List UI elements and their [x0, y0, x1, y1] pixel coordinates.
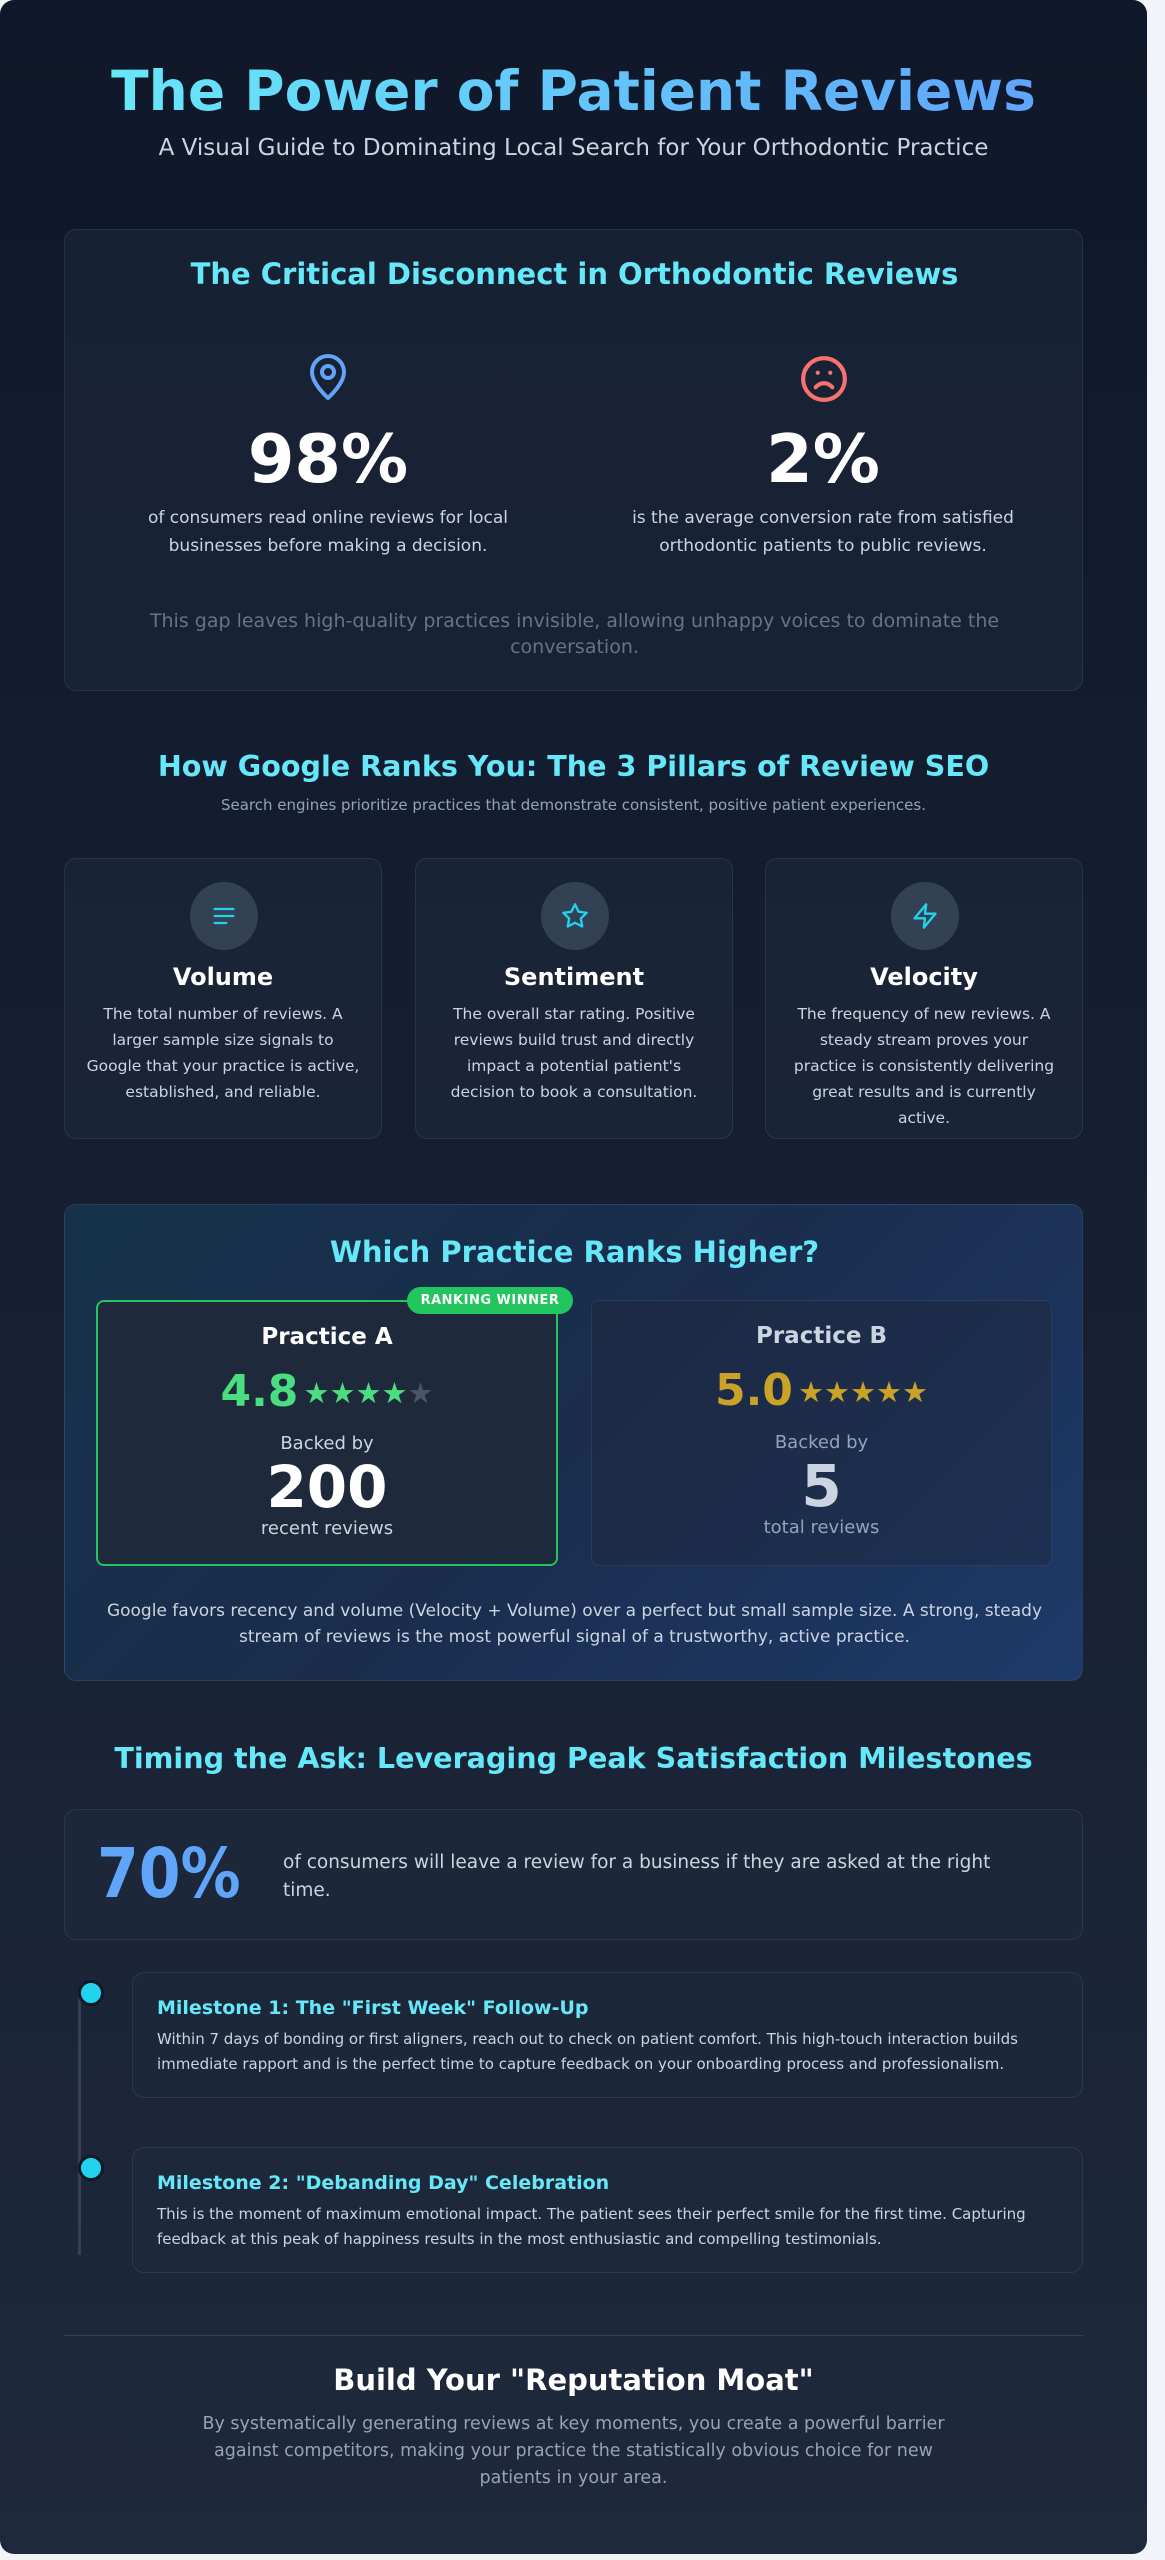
milestone 1: Milestone 1: The "First Week" Follow-Up [157, 1997, 588, 2019]
milestone 2: This is the moment of maximum emotional impact. The patient sees their perfect smile for the first time. Capturing feedback at this peak of happiness results in the most enthusiastic and compelling testimonials. [157, 2205, 1026, 2248]
heading: disconnect: The Critical Disconnect in Orthodontic Reviews [191, 257, 958, 291]
panel: velocity: The frequency of new reviews. A steady stream proves your practice is consistently delivering great results and is currently active. [794, 1005, 1054, 1127]
heading: reputation moat: Build Your "Reputation Moat" [333, 2363, 814, 2397]
panel: sentiment: Sentiment [504, 963, 644, 991]
card: practice A: recent reviews [261, 1518, 393, 1539]
timeline line [78, 1993, 81, 2255]
card: practice A: Practice A [261, 1324, 393, 1350]
note: Google favors recency and volume (Velocity + Volume) over a perfect but small sample size. A strong, steady stream of reviews is the most powerful signal of a trustworthy, active practice. [107, 1601, 1042, 1647]
stat: 98%: 98% [248, 420, 408, 498]
stat: 98%: businesses before making a decision. [169, 536, 487, 556]
badge: ranking winner: RANKING WINNER [421, 1293, 559, 1308]
icon: sad face [801, 356, 847, 402]
rating 4.8: 4.8 ★★★★★ [220, 1366, 434, 1417]
pillars subtitle: Search engines prioritize practices that demonstrate consistent, positive patient experiences. [221, 796, 926, 814]
panel: volume: established, and reliable. [125, 1083, 321, 1101]
title: The Power of Patient Reviews [111, 59, 1036, 123]
panel: 70% stat: of consumers will leave a review for a business if they are asked at the right [283, 1852, 990, 1873]
closing text: By systematically generating reviews at key moments, you create a powerful barrier against competitors, making your practice the statistically obvious choice for new patients in your area. [202, 2414, 945, 2488]
milestone 1 [132, 1972, 1083, 2098]
stat: 2%: orthodontic patients to public reviews. [659, 536, 987, 556]
panel: volume [64, 858, 382, 1139]
stat: 2%: 2% [766, 420, 880, 498]
icon: dot 1 [78, 1980, 104, 2006]
milestone 2: Milestone 2: "Debanding Day" Celebration [157, 2172, 609, 2194]
heading: pillars: How Google Ranks You: The 3 Pillars of Review SEO [158, 749, 989, 783]
icon: star [541, 882, 609, 950]
card: practice B: Backed by [775, 1432, 868, 1453]
card: practice B: total reviews [764, 1517, 879, 1538]
card: practice A [96, 1300, 558, 1566]
stat: 2% [632, 420, 1014, 556]
card: practice B [591, 1300, 1052, 1566]
card: practice A: Backed by [280, 1433, 374, 1454]
panel: volume: Volume [173, 963, 273, 991]
panel: sentiment: The overall star rating. Positive reviews build trust and directly impact a potential patient's decision to book a consultation. [451, 1005, 697, 1101]
panel: volume: The total number of reviews. A [103, 1005, 343, 1023]
stat: 98% [148, 420, 508, 556]
card: practice B: Practice B [756, 1323, 887, 1349]
card: practice A: 200 [266, 1453, 388, 1521]
panel: critical disconnect [64, 229, 1083, 691]
heading: comparison: Which Practice Ranks Higher? [330, 1235, 819, 1269]
panel: volume: Google that your practice is active, [87, 1057, 359, 1075]
footnote: This gap leaves high-quality practices invisible, allowing unhappy voices to dominate the conversation. [150, 610, 999, 658]
heading: timing: Timing the Ask: Leveraging Peak Satisfaction Milestones [114, 1741, 1033, 1775]
icon: dot 2 [78, 2155, 104, 2181]
panel: velocity [765, 858, 1083, 1139]
rating 5.0: 5.0 ★★★★★ [715, 1365, 928, 1416]
panel: 70% stat: time. [283, 1880, 331, 1901]
subtitle: A Visual Guide to Dominating Local Search for Your Orthodontic Practice [159, 135, 988, 161]
panel: volume: larger sample size signals to [112, 1031, 334, 1049]
icon: bolt [891, 882, 959, 950]
panel: 70% stat [64, 1809, 1083, 1940]
card: practice B: 5 [801, 1452, 842, 1520]
stat: 98%: of consumers read online reviews for local [148, 508, 508, 528]
icon: location pin [310, 354, 346, 400]
icon: lines [190, 882, 258, 950]
badge: ranking winner [407, 1287, 573, 1314]
milestone 2 [132, 2147, 1083, 2273]
panel: 70% stat: 70% [97, 1834, 241, 1914]
panel: velocity: Velocity [870, 963, 978, 991]
panel: comparison [64, 1204, 1083, 1681]
panel: sentiment [415, 858, 733, 1139]
stat: 2%: is the average conversion rate from satisfied [632, 508, 1014, 528]
milestone 1: Within 7 days of bonding or first aligners, reach out to check on patient comfort. This high-touch interaction builds immediate rapport and is the perfect time to capture feedback on your onboarding process and professionalism. [157, 2030, 1018, 2073]
